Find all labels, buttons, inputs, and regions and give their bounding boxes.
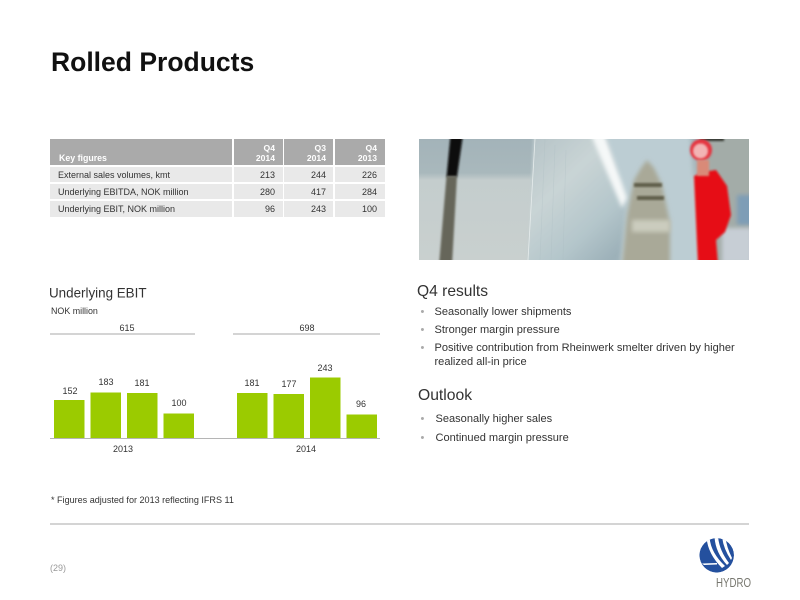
text block: Q4 results: Stronger margin pressure xyxy=(434,324,560,336)
text block: Q4 results: Q4 results xyxy=(417,283,488,300)
table header row xyxy=(50,139,385,165)
table row: underlying EBITDA: Underlying EBITDA, NOK million xyxy=(58,187,189,197)
table row: external sales volumes: 244 xyxy=(311,170,326,180)
table row: external sales volumes: 213 xyxy=(260,170,275,180)
text block: Outlook: Seasonally higher sales xyxy=(436,413,553,425)
table row: external sales volumes xyxy=(50,167,385,182)
table row: underlying EBIT: 100 xyxy=(362,204,377,214)
table row: underlying EBITDA: 417 xyxy=(311,187,326,197)
bar value labels: 183 xyxy=(98,377,114,387)
text block: Outlook xyxy=(418,387,569,444)
bar value labels xyxy=(62,363,366,409)
text block: Q4 results: Seasonally lower shipments xyxy=(434,306,572,318)
total 2014: 698 xyxy=(299,323,315,333)
bar value labels: 100 xyxy=(171,398,187,408)
bar value labels: 181 xyxy=(244,378,260,388)
table row: underlying EBIT: 243 xyxy=(311,204,326,214)
text block: Outlook: • xyxy=(420,432,424,444)
table row: underlying EBIT: Underlying EBIT, NOK million xyxy=(58,204,175,214)
text block: Outlook: Outlook xyxy=(418,387,472,404)
table header row: Q4 xyxy=(366,143,377,153)
table header row: Key figures xyxy=(59,153,107,163)
table row: underlying EBITDA: 280 xyxy=(260,187,275,197)
bar value labels: 152 xyxy=(62,386,78,396)
bar value labels: 181 xyxy=(134,378,150,388)
chart: underlying EBIT xyxy=(49,286,380,454)
table header row: 2014 xyxy=(307,153,326,163)
text block: Q4 results: realized all-in price xyxy=(434,356,527,368)
text block: Q4 results: • xyxy=(420,324,424,336)
total 2013: 615 xyxy=(119,323,135,333)
year labels: 2014 xyxy=(296,444,316,454)
text block: Outlook: • xyxy=(420,413,424,425)
text block: Outlook: Continued margin pressure xyxy=(436,432,569,444)
year labels xyxy=(113,444,316,454)
bars 2013 xyxy=(54,392,194,438)
table header row: 2013 xyxy=(358,153,377,163)
footnote: * Figures adjusted for 2013 reflecting IFRS 11 xyxy=(51,495,234,505)
table row: underlying EBITDA xyxy=(50,184,385,199)
logo: Hydro: HYDRO xyxy=(716,575,751,590)
year labels: 2013 xyxy=(113,444,133,454)
photo: aluminium coils with worker in red xyxy=(419,135,753,265)
table: key figures xyxy=(50,139,385,217)
chart unit: NOK million xyxy=(51,306,98,316)
text block: Q4 results: • xyxy=(420,306,424,318)
page number: (29) xyxy=(50,563,66,573)
table header row: Q3 xyxy=(315,143,326,153)
bar value labels: 243 xyxy=(317,363,333,373)
title: Rolled Products xyxy=(51,47,254,77)
chart heading: Underlying EBIT xyxy=(49,286,146,300)
table row: underlying EBIT: 96 xyxy=(265,204,275,214)
bar value labels: 177 xyxy=(281,379,297,389)
table row: external sales volumes: 226 xyxy=(362,170,377,180)
table header row: Q4 xyxy=(264,143,275,153)
table row: underlying EBIT xyxy=(50,201,385,217)
table row: underlying EBITDA: 284 xyxy=(362,187,377,197)
logo: Hydro xyxy=(699,536,751,590)
table row: external sales volumes: External sales volumes, kmt xyxy=(58,170,171,180)
bars 2014 xyxy=(237,378,377,438)
bar value labels: 96 xyxy=(356,399,366,409)
text block: Q4 results: • xyxy=(420,342,424,354)
text block: Q4 results: Positive contribution from Rheinwerk smelter driven by higher xyxy=(434,342,735,354)
text block: Q4 results xyxy=(417,283,735,368)
table header row: 2014 xyxy=(256,153,275,163)
